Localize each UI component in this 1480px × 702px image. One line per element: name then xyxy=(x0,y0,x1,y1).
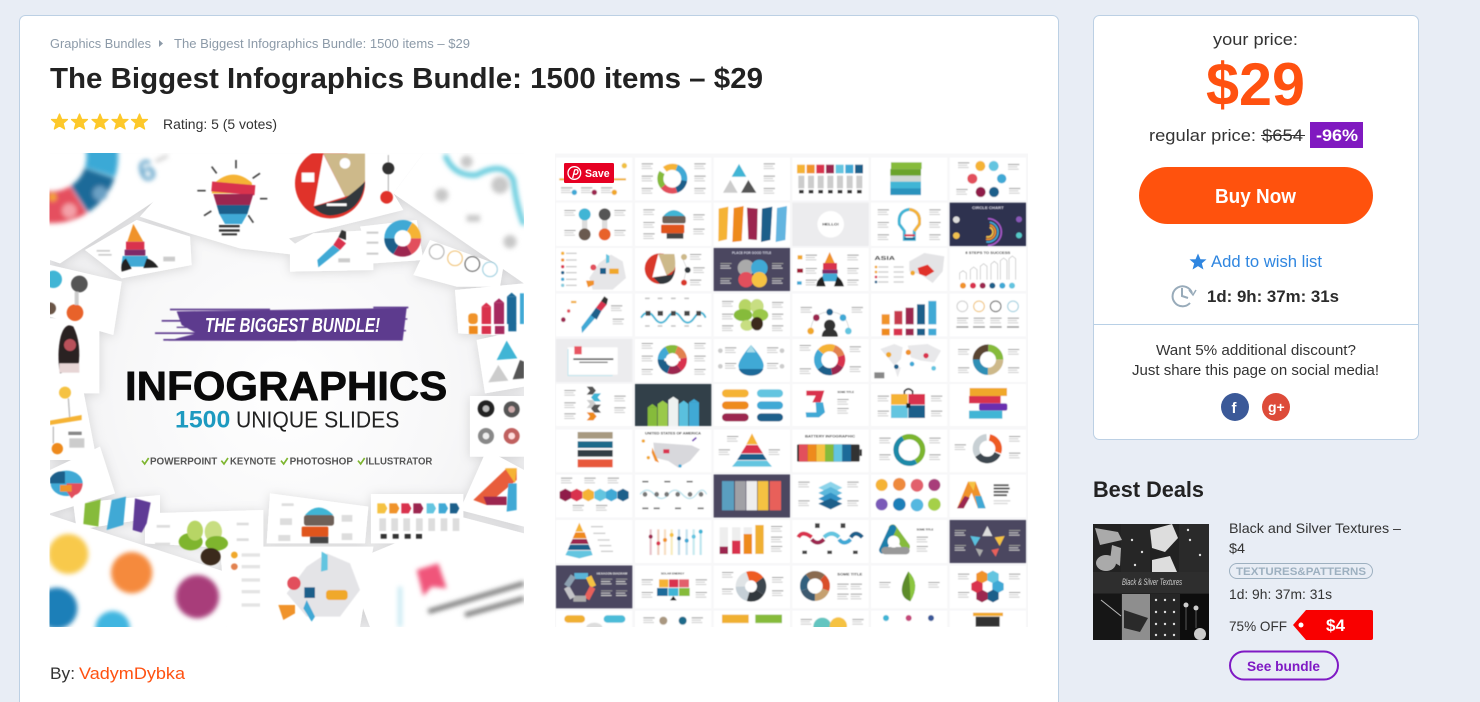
deal thumbnail: textures xyxy=(1093,524,1209,640)
icon: google plus xyxy=(1262,393,1290,421)
battery title: BATTERY INFOGRAPHIC xyxy=(805,434,855,438)
category tag: TEXTURES&PATTERNS xyxy=(1236,566,1366,578)
slide title: PLACE FOR GOOD TITLE xyxy=(732,251,772,255)
INFOGRAPHICS headline: INFOGRAPHICS xyxy=(125,363,447,409)
purple brush banner xyxy=(155,307,408,341)
banner text: THE BIGGEST BUNDLE! xyxy=(205,315,380,337)
row 4 xyxy=(556,294,632,337)
chart title: CIRCLE CHART xyxy=(972,206,1005,210)
row 2 xyxy=(564,208,626,241)
discount note: Just share this page on social media! xyxy=(1132,362,1379,379)
USA map title: UNITED STATES OF AMERICA xyxy=(645,432,702,436)
blobs xyxy=(48,534,88,574)
asia label: ASIA xyxy=(874,256,895,262)
price: $29 xyxy=(1206,51,1305,118)
top-left ring xyxy=(50,153,122,227)
pinterest save button xyxy=(564,163,614,183)
sharp collage graphics xyxy=(44,148,524,622)
deal title xyxy=(1229,520,1401,556)
blurred foreground graphics xyxy=(50,153,524,627)
software list: POWERPOINT xyxy=(150,457,217,468)
row 3 xyxy=(556,248,632,291)
letter A xyxy=(473,468,517,512)
blurred number: 6 xyxy=(134,153,160,189)
triangle icons xyxy=(488,341,524,382)
colored ring xyxy=(389,225,416,252)
software list xyxy=(141,458,432,466)
team avatars xyxy=(478,400,520,444)
slide heading: SOME TITLE xyxy=(917,528,933,532)
see bundle button: See bundle xyxy=(1247,658,1320,674)
top-right wave xyxy=(445,155,524,225)
software list: KEYNOTE xyxy=(230,457,276,468)
discount badge: -96% xyxy=(1316,126,1358,145)
your price label: your price: xyxy=(1213,30,1298,49)
regular price: $654 xyxy=(1262,126,1303,145)
subtitle: 1500 unique slides xyxy=(176,410,398,432)
inner slide cards xyxy=(50,153,524,627)
author line: VadymDybka xyxy=(79,664,186,683)
pencil xyxy=(317,230,378,267)
row 8 xyxy=(556,474,632,517)
steps title: 6 STEPS TO SUCCESS xyxy=(965,251,1011,255)
icon: google plus: g+ xyxy=(1268,399,1285,415)
price tag: $4 xyxy=(1326,616,1346,635)
deal countdown: 1d: 9h: 37m: 31s xyxy=(1229,586,1332,602)
percent rings xyxy=(429,244,497,277)
panel: price box xyxy=(1094,16,1418,440)
star rating xyxy=(52,114,148,129)
breadcrumb: The Biggest Infographics Bundle: 1500 items – $29 xyxy=(174,37,470,51)
breadcrumb xyxy=(50,37,470,51)
slide title: SOLAR ENERGY xyxy=(661,572,684,576)
row 11 xyxy=(556,611,632,632)
regular price xyxy=(1149,126,1305,145)
clover xyxy=(155,521,249,565)
cover image: infographics collage xyxy=(50,153,524,627)
bulb xyxy=(197,160,267,235)
timeline fragment xyxy=(50,387,84,454)
add to wish list: Add to wish list xyxy=(1211,252,1322,271)
title: The Biggest Infographics Bundle: 1500 items – $29 xyxy=(50,63,763,95)
panel: product card xyxy=(1,16,1059,702)
brain xyxy=(50,471,83,498)
subtitle: 1500 unique slides: UNIQUE SLIDES xyxy=(236,407,399,433)
row 6 xyxy=(556,384,632,426)
discount note xyxy=(1132,342,1379,379)
map xyxy=(231,552,360,622)
best deals heading: Best Deals xyxy=(1093,477,1204,502)
portrait xyxy=(58,325,79,373)
row 5 xyxy=(556,339,632,382)
numbered steps xyxy=(377,503,459,539)
price tag xyxy=(1293,610,1373,640)
preview grid image xyxy=(555,153,1028,636)
see bundle button xyxy=(1230,652,1338,680)
deal title: Black and Silver Textures – xyxy=(1229,520,1401,536)
save label: Save xyxy=(585,168,610,180)
SWOT fragment xyxy=(44,271,88,321)
countdown: 1d: 9h: 37m: 31s xyxy=(1207,287,1339,306)
software list: PHOTOSHOP xyxy=(290,457,353,468)
author line: By: xyxy=(50,664,75,683)
breadcrumb: Graphics Bundles xyxy=(50,37,151,51)
rocket xyxy=(97,224,175,272)
deal thumbnail: textures: Black & Silver Textures xyxy=(1122,577,1182,587)
bar arrows xyxy=(468,293,524,334)
panel: deal item xyxy=(1093,520,1401,680)
rating text: Rating: 5 (5 votes) xyxy=(163,116,277,132)
row 1 xyxy=(558,162,628,196)
subtitle: 1500 unique slides: 1500 xyxy=(175,407,230,434)
row 10 xyxy=(556,565,632,608)
icon: clock xyxy=(1173,286,1196,306)
row 9 xyxy=(556,520,632,563)
row 7 xyxy=(556,429,632,472)
hat xyxy=(278,503,352,543)
category tag xyxy=(1230,564,1372,578)
brush ribbons xyxy=(83,497,151,533)
deal title: $4 xyxy=(1229,540,1245,556)
slide heading: SOME TITLE xyxy=(837,572,863,576)
quote slide xyxy=(417,563,447,596)
software list: ILLUSTRATOR xyxy=(366,457,432,468)
pie chart xyxy=(295,148,394,218)
regular price: regular price: xyxy=(1149,126,1256,145)
buy now button: Buy Now xyxy=(1215,186,1296,208)
discount text: 75% OFF xyxy=(1229,618,1287,634)
discount note: Want 5% additional discount? xyxy=(1156,342,1356,359)
slide heading: SOME TITLE xyxy=(837,390,854,394)
buy now button xyxy=(1139,167,1373,224)
slide title: HEXAGON DIAGRAM xyxy=(597,572,628,576)
discount badge xyxy=(1310,122,1363,148)
icon: facebook xyxy=(1221,393,1249,421)
hello label: HELLO! xyxy=(822,222,839,227)
icon: facebook: f xyxy=(1232,400,1238,417)
